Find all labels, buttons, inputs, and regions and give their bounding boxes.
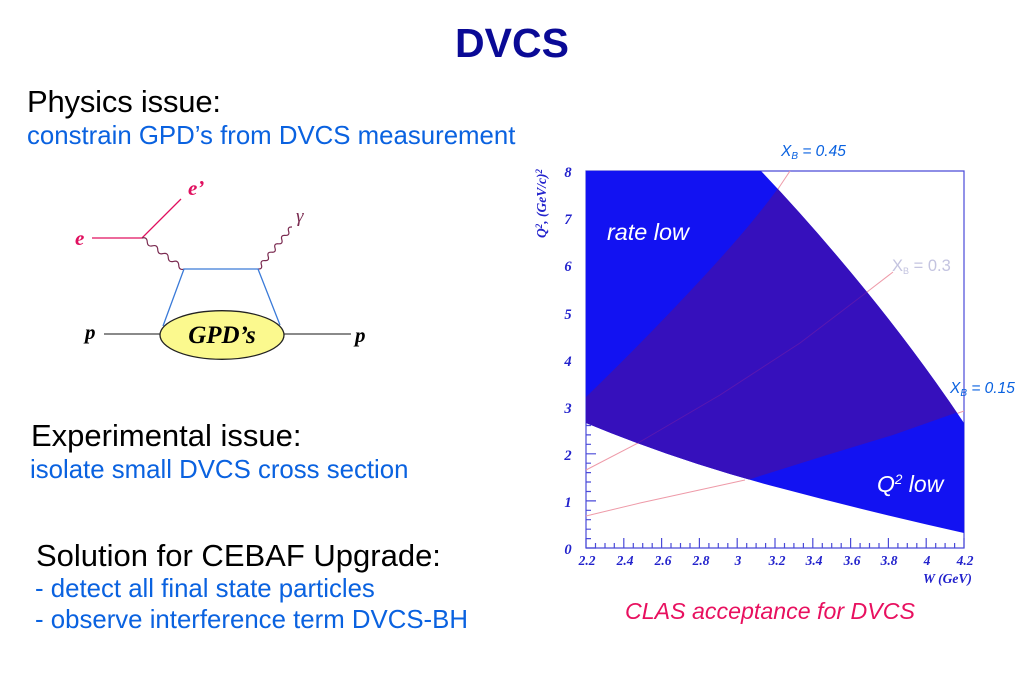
y axis numbers: 2 bbox=[563, 448, 572, 464]
text block: physics issue bbox=[27, 84, 515, 150]
text block: experimental issue: isolate small DVCS cross section bbox=[30, 456, 408, 484]
text block: experimental issue: Experimental issue: bbox=[31, 418, 302, 453]
xB labels: = 0.45 bbox=[798, 143, 846, 160]
plot frame and ticks bbox=[586, 171, 964, 548]
GPD ellipse bbox=[160, 311, 284, 359]
proton lines bbox=[104, 333, 351, 335]
xB labels: B bbox=[791, 151, 798, 162]
xB labels bbox=[780, 143, 1015, 399]
y axis title: Q bbox=[534, 228, 549, 238]
x axis numbers: 3.4 bbox=[805, 553, 823, 568]
diagram: DVCS handbag bbox=[75, 176, 366, 359]
xB 0.3 line inside bbox=[638, 292, 867, 443]
title: DVCS bbox=[455, 20, 569, 66]
text block: solution: Solution for CEBAF Upgrade: bbox=[36, 538, 441, 573]
xB labels: B bbox=[960, 388, 967, 399]
x axis numbers: 4.2 bbox=[956, 553, 974, 568]
xB labels: X bbox=[892, 257, 903, 275]
text block: solution: - detect all final state particles bbox=[35, 575, 375, 603]
region labels: rate low bbox=[607, 219, 691, 245]
electron lines bbox=[92, 199, 181, 238]
y axis title: 2 bbox=[534, 223, 544, 229]
y axis numbers: 4 bbox=[563, 354, 572, 370]
xB lines on white bbox=[586, 171, 964, 516]
quark lines bbox=[163, 269, 280, 326]
xB labels: = 0.15 bbox=[967, 380, 1015, 397]
y axis numbers: 5 bbox=[564, 307, 572, 323]
x axis numbers: 2.4 bbox=[616, 553, 634, 568]
virtual photon bbox=[142, 238, 184, 269]
x axis title: W (GeV) bbox=[923, 571, 972, 586]
y axis numbers: 8 bbox=[564, 165, 572, 181]
chart: CLAS acceptance: Q bbox=[877, 471, 895, 497]
GPD label: GPD’s bbox=[188, 322, 256, 349]
y axis numbers: 0 bbox=[564, 542, 572, 558]
particle labels bbox=[75, 176, 366, 347]
particle labels: e bbox=[75, 226, 84, 250]
y axis numbers: 3 bbox=[563, 401, 572, 417]
x axis numbers: 2.8 bbox=[692, 553, 710, 568]
y axis title: 2 bbox=[534, 169, 544, 175]
chart: CLAS acceptance: 2 bbox=[894, 472, 903, 487]
x axis numbers: 2.2 bbox=[578, 553, 596, 568]
text block: experimental issue bbox=[30, 418, 408, 484]
real photon bbox=[258, 227, 292, 269]
text block: physics issue: constrain GPD’s from DVCS measurement bbox=[27, 122, 515, 150]
y axis numbers: 1 bbox=[564, 495, 572, 511]
text block: solution bbox=[35, 538, 468, 634]
text block: solution: - observe interference term DVCS-BH bbox=[35, 606, 468, 634]
x axis numbers: 3 bbox=[734, 553, 742, 568]
xB labels: X bbox=[781, 143, 791, 160]
x axis numbers: 3.6 bbox=[843, 553, 861, 568]
xB labels: B bbox=[903, 266, 909, 276]
x axis numbers bbox=[578, 553, 974, 568]
overlap region bbox=[586, 188, 957, 480]
x axis numbers: 4 bbox=[923, 553, 931, 568]
y axis numbers: 6 bbox=[564, 259, 572, 275]
particle labels: p bbox=[83, 320, 96, 344]
particle labels: p bbox=[353, 323, 366, 347]
x axis numbers: 3.8 bbox=[880, 553, 898, 568]
xB labels: = 0.3 bbox=[909, 257, 951, 275]
chart: CLAS acceptance: low bbox=[902, 471, 945, 497]
text block: physics issue: Physics issue: bbox=[27, 84, 221, 119]
xB labels: X bbox=[950, 380, 960, 397]
chart: CLAS acceptance bbox=[534, 143, 1015, 586]
particle labels: e’ bbox=[188, 176, 204, 200]
y axis numbers: 7 bbox=[564, 212, 572, 228]
acceptance region bbox=[586, 171, 964, 533]
particle labels: γ bbox=[296, 206, 304, 227]
y axis title: , (GeV/c) bbox=[534, 174, 549, 225]
chart caption: CLAS acceptance for DVCS bbox=[625, 598, 916, 624]
x axis numbers: 3.2 bbox=[768, 553, 786, 568]
x axis numbers: 2.6 bbox=[654, 553, 672, 568]
y axis numbers bbox=[563, 165, 572, 558]
